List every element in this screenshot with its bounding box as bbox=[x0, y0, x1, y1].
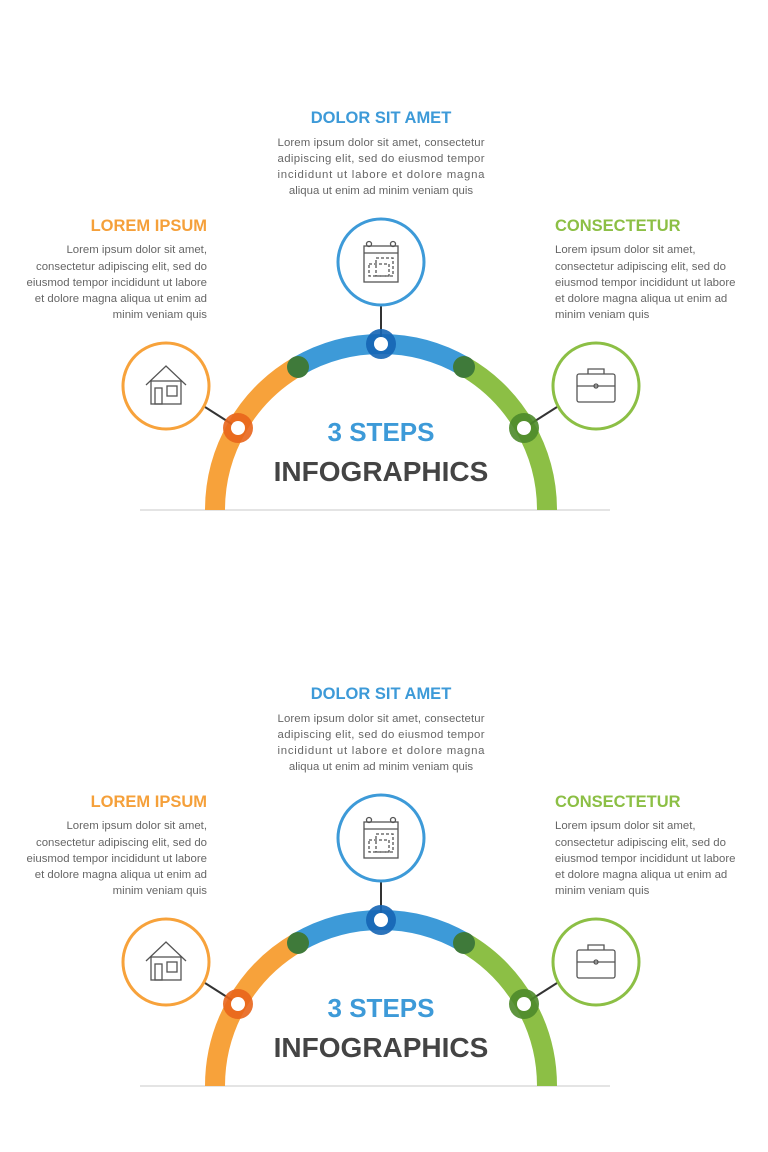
panel: consectetur text: CONSECTETUR bbox=[555, 217, 681, 235]
panel: dolor sit amet text: DOLOR SIT AMET bbox=[311, 109, 451, 127]
panel: consectetur text: CONSECTETUR bbox=[555, 793, 681, 811]
panel: lorem ipsum text bbox=[27, 217, 207, 321]
center title bbox=[274, 993, 488, 1063]
panel: lorem ipsum text: et dolore magna aliqua ut enim ad bbox=[35, 869, 207, 881]
panel: dolor sit amet text: Lorem ipsum dolor sit amet, consectetur bbox=[278, 713, 485, 725]
panel: lorem ipsum text: Lorem ipsum dolor sit amet, bbox=[66, 820, 207, 832]
arch chart bbox=[215, 344, 547, 510]
center title: INFOGRAPHICS bbox=[274, 456, 488, 487]
panel: consectetur text bbox=[555, 217, 735, 321]
center title bbox=[274, 417, 488, 487]
panel: dolor sit amet text: incididunt ut labore et dolore magna bbox=[278, 169, 485, 181]
markers bbox=[223, 329, 539, 443]
panel: dolor sit amet text: adipiscing elit, sed do eiusmod tempor bbox=[278, 729, 485, 741]
panel: lorem ipsum text: consectetur adipiscing elit, sed do bbox=[36, 261, 207, 273]
panel: lorem ipsum text: Lorem ipsum dolor sit amet, bbox=[66, 244, 207, 256]
icon: briefcase circle bbox=[553, 919, 639, 1005]
icon: house circle bbox=[123, 919, 209, 1005]
panel: dolor sit amet text: adipiscing elit, sed do eiusmod tempor bbox=[278, 153, 485, 165]
arch chart bbox=[215, 920, 547, 1086]
connectors bbox=[205, 305, 557, 428]
panel: consectetur text: minim veniam quis bbox=[555, 885, 650, 897]
panel: dolor sit amet text bbox=[278, 109, 485, 197]
center title: 3 STEPS bbox=[328, 993, 434, 1023]
panel: consectetur text bbox=[555, 793, 735, 897]
panel: lorem ipsum text: consectetur adipiscing elit, sed do bbox=[36, 837, 207, 849]
center title: 3 STEPS bbox=[328, 417, 434, 447]
panel: lorem ipsum text: minim veniam quis bbox=[113, 309, 207, 321]
panel: dolor sit amet text: Lorem ipsum dolor sit amet, consectetur bbox=[278, 137, 485, 149]
panel: lorem ipsum text: eiusmod tempor incididunt ut labore bbox=[27, 853, 207, 865]
panel: dolor sit amet text: aliqua ut enim ad minim veniam quis bbox=[289, 761, 473, 773]
panel: lorem ipsum text: et dolore magna aliqua ut enim ad bbox=[35, 293, 207, 305]
panel: lorem ipsum text: minim veniam quis bbox=[113, 885, 207, 897]
panel: dolor sit amet text: DOLOR SIT AMET bbox=[311, 685, 451, 703]
base line bbox=[140, 1085, 610, 1087]
panel: consectetur text: et dolore magna aliqua ut enim ad bbox=[555, 869, 727, 881]
panel: consectetur text: minim veniam quis bbox=[555, 309, 650, 321]
panel: consectetur text: Lorem ipsum dolor sit amet, bbox=[555, 244, 696, 256]
panel: consectetur text: consectetur adipiscing elit, sed do bbox=[555, 261, 726, 273]
panel: consectetur text: consectetur adipiscing elit, sed do bbox=[555, 837, 726, 849]
panel: dolor sit amet text: incididunt ut labore et dolore magna bbox=[278, 745, 485, 757]
panel: dolor sit amet text bbox=[278, 685, 485, 773]
center title: INFOGRAPHICS bbox=[274, 1032, 488, 1063]
icon: briefcase circle bbox=[553, 343, 639, 429]
panel: lorem ipsum text: LOREM IPSUM bbox=[91, 217, 207, 235]
panel: consectetur text: eiusmod tempor incididunt ut labore bbox=[555, 853, 735, 865]
panel: dolor sit amet text: aliqua ut enim ad minim veniam quis bbox=[289, 185, 473, 197]
panel: consectetur text: eiusmod tempor incididunt ut labore bbox=[555, 277, 735, 289]
panel: consectetur text: et dolore magna aliqua ut enim ad bbox=[555, 293, 727, 305]
markers bbox=[223, 905, 539, 1019]
icon: house circle bbox=[123, 343, 209, 429]
panel: lorem ipsum text: eiusmod tempor incididunt ut labore bbox=[27, 277, 207, 289]
connectors bbox=[205, 881, 557, 1004]
panel: lorem ipsum text: LOREM IPSUM bbox=[91, 793, 207, 811]
base line bbox=[140, 509, 610, 511]
icon: calendar circle bbox=[338, 219, 424, 305]
infographic: top copy bbox=[27, 109, 735, 511]
icon: calendar circle bbox=[338, 795, 424, 881]
panel: consectetur text: Lorem ipsum dolor sit amet, bbox=[555, 820, 696, 832]
panel: lorem ipsum text bbox=[27, 793, 207, 897]
infographic: bottom copy bbox=[27, 685, 735, 1087]
